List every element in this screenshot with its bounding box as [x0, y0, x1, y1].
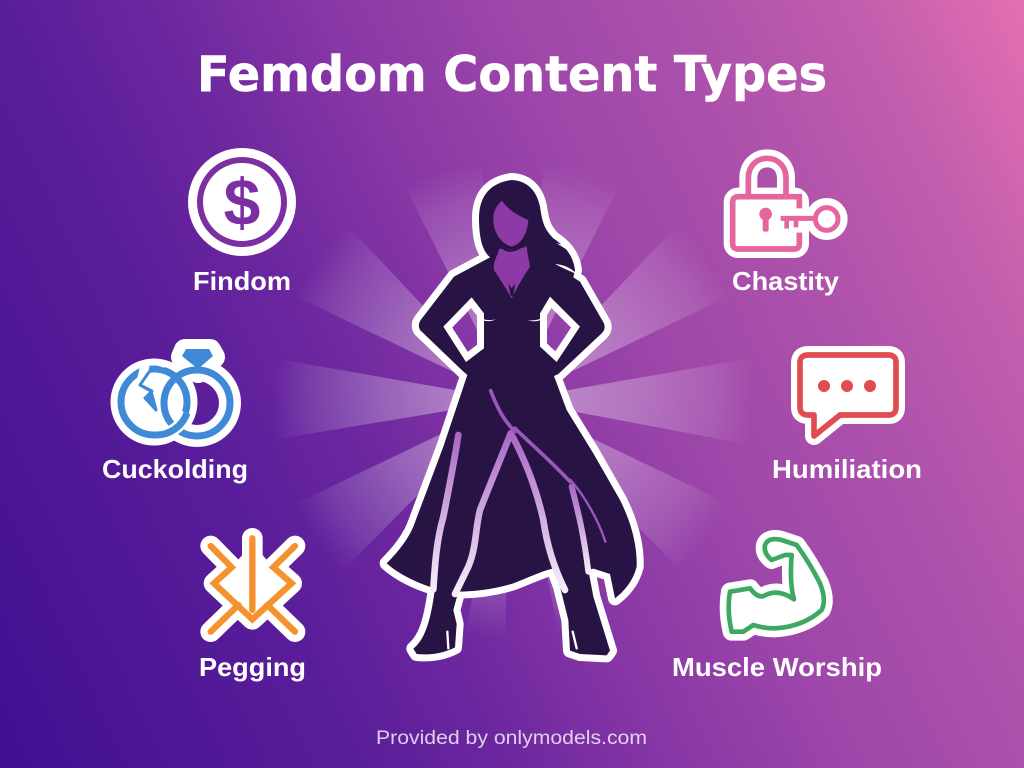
- label: Pegging: Pegging: [199, 652, 306, 682]
- icon: crossed arrows: [211, 538, 295, 632]
- icon: dollar coin: [188, 148, 296, 256]
- Muscle Worship item: [672, 539, 882, 682]
- radiating light rays: [272, 148, 752, 640]
- Cuckolding item: [102, 349, 248, 484]
- neckline shadow: [508, 283, 515, 296]
- face: [493, 201, 528, 247]
- dress slit folds: [491, 391, 605, 542]
- icon: speech bubble: [800, 355, 896, 436]
- ring crack: [140, 362, 156, 412]
- icon: flexed bicep: [729, 539, 824, 632]
- jaw line: [504, 247, 521, 251]
- central figure silhouette: [387, 180, 637, 655]
- title: Femdom Content Types: [197, 46, 827, 103]
- Chastity item: [732, 158, 840, 296]
- heel highlights: [447, 632, 577, 648]
- icon: padlock and key: [733, 158, 839, 249]
- diamond: [182, 349, 213, 369]
- hair highlights: [555, 243, 577, 274]
- label: Cuckolding: Cuckolding: [102, 454, 248, 484]
- label: Findom: Findom: [193, 266, 291, 296]
- Findom item: [188, 148, 296, 296]
- dress and leg contour lines: [433, 433, 588, 594]
- icon: broken ring and diamond ring: [119, 349, 230, 437]
- label: Humiliation: Humiliation: [772, 454, 922, 484]
- label: Muscle Worship: Muscle Worship: [672, 652, 882, 682]
- neckline: [494, 246, 530, 298]
- Humiliation item: [772, 355, 922, 484]
- waist highlights: [475, 316, 547, 321]
- label: Chastity: Chastity: [732, 266, 840, 296]
- footer credit: Provided by onlymodels.com: [376, 727, 647, 749]
- Pegging item: [199, 538, 306, 682]
- left ring lower crossing: [155, 413, 187, 435]
- icon: dollar coin: $: [224, 165, 260, 239]
